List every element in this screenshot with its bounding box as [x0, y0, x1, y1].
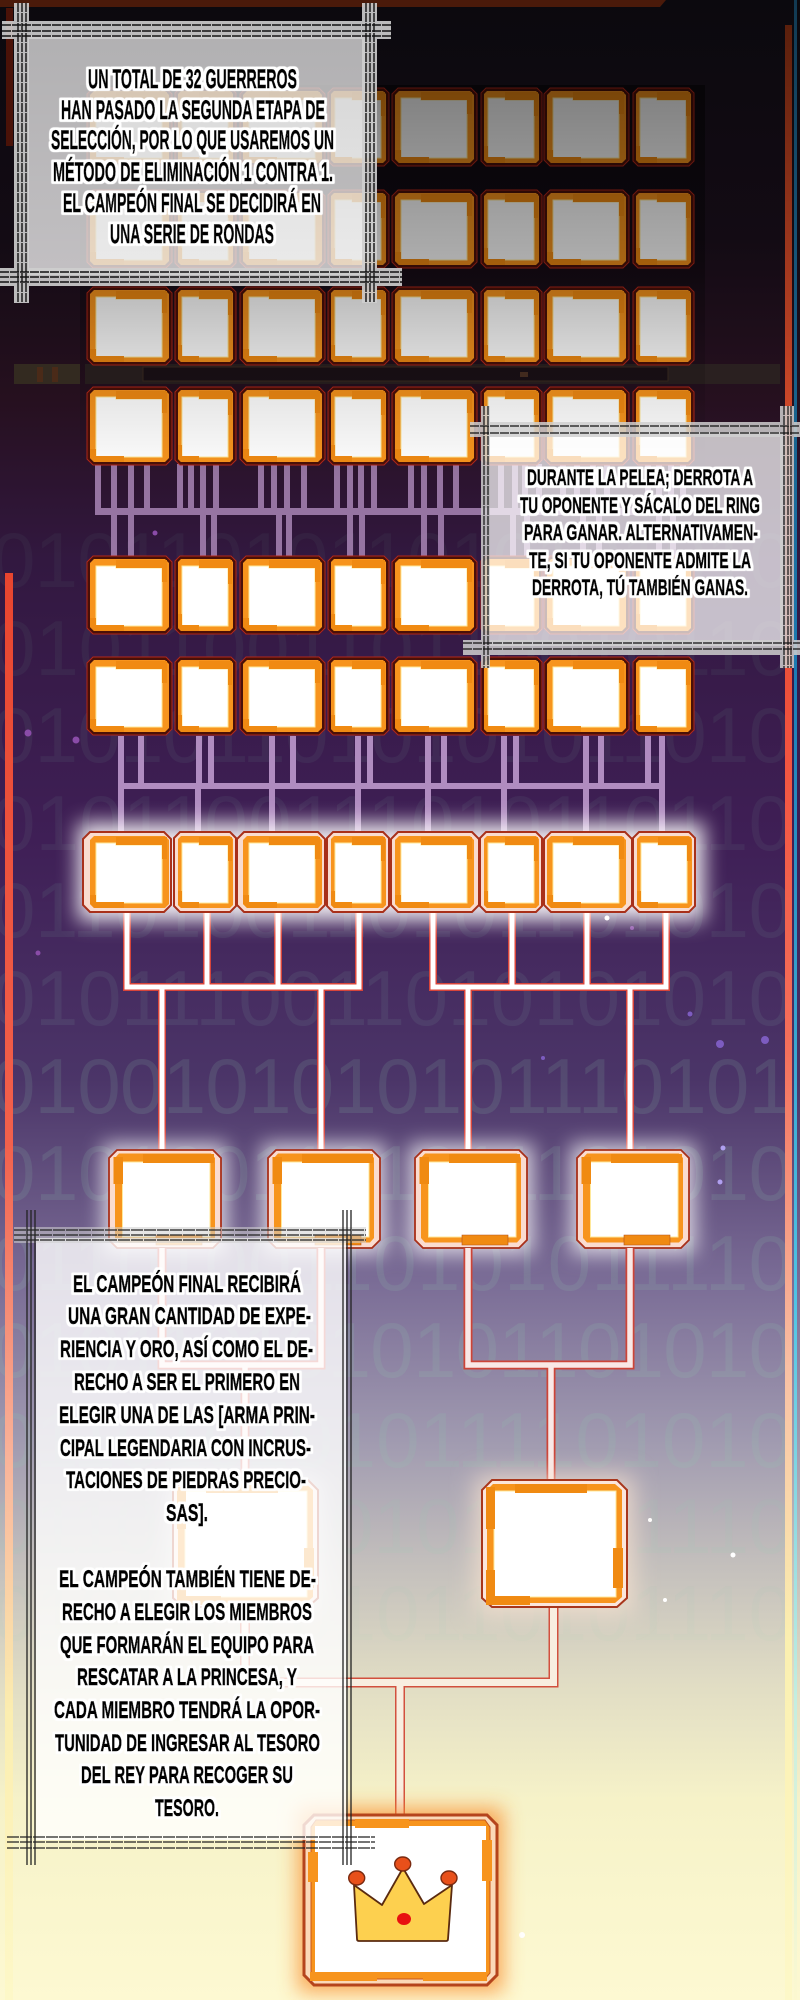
glow behind highlighted row	[78, 823, 704, 921]
side strip: right	[785, 25, 792, 2000]
text block: champion reward: RESCATAR A LA PRINCESA, Y	[77, 1664, 297, 1691]
quarter final cards	[109, 1150, 689, 1248]
text block: intro: UN TOTAL DE 32 GUERREROS	[88, 64, 297, 94]
glow behind quarter cards	[103, 1144, 695, 1254]
semi final card right	[482, 1480, 627, 1607]
panel: champion reward note	[7, 1210, 375, 1865]
glow behind final card	[298, 1808, 503, 1992]
binary digit background: 0101101011010101010	[0, 516, 792, 604]
binary digit background	[0, 516, 792, 1657]
semi final card left	[173, 1480, 318, 1607]
text block: champion reward: CADA MIEMBRO TENDRÁ LA OPOR-	[54, 1696, 320, 1724]
binary digit background: 0110101010111101010	[0, 1396, 792, 1484]
glow behind semi final cards	[170, 1476, 633, 1614]
connectors: round of 32 upper	[95, 464, 687, 556]
side strip: left	[5, 573, 13, 2000]
text block: champion reward: RECHO A SER EL PRIMERO EN	[74, 1369, 300, 1396]
binary digit background: 0101011010101011010	[0, 691, 792, 779]
brackets: semi final	[162, 1248, 630, 1480]
text block: champion reward: CIPAL LEGENDARIA CON INCRUS-	[60, 1435, 311, 1462]
text block: champion reward: UNA GRAN CANTIDAD DE EXPE-	[68, 1303, 311, 1330]
binary digit background: 0101101010101101010	[0, 1306, 792, 1394]
text block: champion reward: TESORO.	[155, 1795, 219, 1822]
binary digit background: 0101110011010101010	[0, 954, 792, 1042]
panel: intro note	[0, 3, 402, 303]
binary digit background: 0101001101011101010	[0, 1129, 792, 1217]
binary digit background: 0101101010110101110	[0, 1569, 792, 1657]
top darkening veil	[80, 85, 705, 480]
text block: champion reward: DEL REY PARA RECOGER SU	[81, 1762, 293, 1789]
side strip: blue	[794, 0, 797, 2000]
splatter particles	[24, 530, 769, 1938]
text block: champion reward: EL CAMPEÓN TAMBIÉN TIENE DE-	[59, 1565, 316, 1593]
text block: champion reward: RECHO A ELEGIR LOS MIEMBROS	[62, 1599, 312, 1626]
text block: champion reward: QUE FORMARÁN EL EQUIPO PARA	[60, 1631, 314, 1659]
binary digit background: 0110100101010101110	[0, 1482, 792, 1570]
scan bar	[14, 364, 780, 384]
text block: champion reward: RIENCIA Y ORO, ASÍ COMO EL DE-	[60, 1335, 313, 1363]
binary digit background: 0101100111010110110	[0, 779, 792, 867]
brackets: round of 8	[127, 912, 666, 1150]
text block: intro: SELECCIÓN, POR LO QUE USAREMOS UN	[51, 125, 334, 155]
connectors: round of 16	[118, 736, 665, 833]
text block: intro: UNA SERIE DE RONDAS	[110, 219, 274, 249]
text block: champion reward	[54, 1270, 320, 1822]
text block: champion reward: TACIONES DE PIEDRAS PRECIO-	[66, 1467, 306, 1494]
card rows 1 to 6	[87, 88, 694, 735]
text block: fight rules	[520, 465, 760, 600]
final card	[304, 1815, 497, 1985]
text block: intro: HAN PASADO LA SEGUNDA ETAPA DE	[61, 95, 325, 125]
text block: champion reward: SAS].	[166, 1500, 208, 1527]
binary digit background: 0110100110101101010	[0, 866, 792, 954]
text block: champion reward: EL CAMPEÓN FINAL RECIBIRÁ	[73, 1270, 301, 1298]
card row 7 highlighted	[83, 832, 695, 912]
text block: intro: MÉTODO DE ELIMINACIÓN 1 CONTRA 1.	[53, 157, 333, 187]
side strip: left upper dark	[6, 8, 13, 146]
binary digit background: 0110100110101011110	[0, 1219, 792, 1307]
binary digit background: 0100101010101110101	[0, 1042, 792, 1130]
panel: fight rules note	[463, 406, 800, 668]
text block: champion reward: TUNIDAD DE INGRESAR AL TESORO	[55, 1730, 320, 1757]
icon: crown	[349, 1857, 457, 1941]
text block: intro: EL CAMPEÓN FINAL SE DECIDIRÁ EN	[63, 188, 321, 218]
text block: intro	[51, 64, 334, 249]
text block: champion reward: ELEGIR UNA DE LAS [ARMA PRIN-	[59, 1402, 315, 1429]
binary digit background: 0101100110110010110	[0, 604, 792, 692]
brackets: final	[245, 1608, 554, 1815]
top bar	[0, 0, 666, 7]
